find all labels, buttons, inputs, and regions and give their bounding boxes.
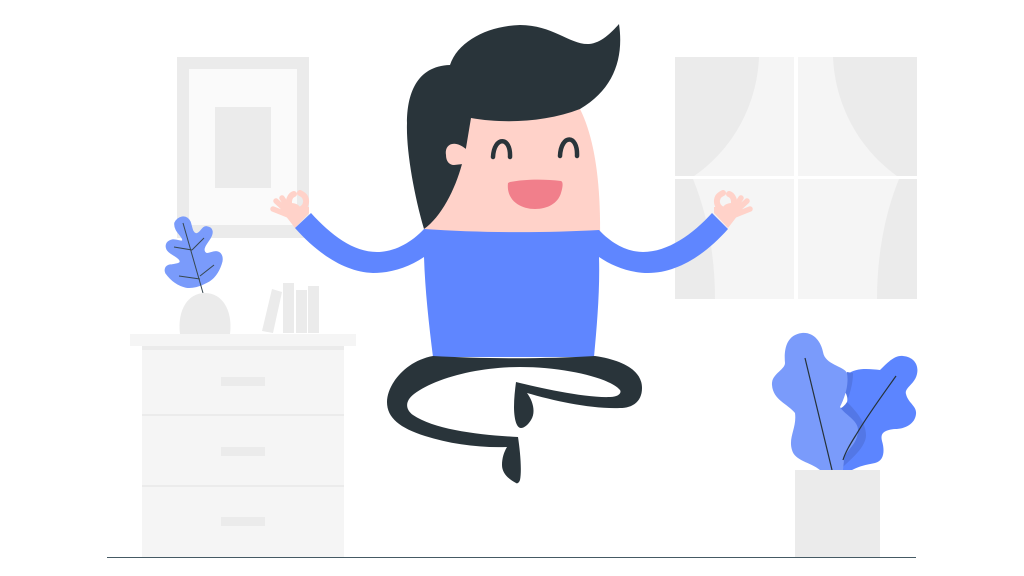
hair bbox=[407, 24, 620, 229]
picture frame bbox=[177, 57, 309, 238]
large plant bbox=[772, 333, 917, 470]
sweater and arms bbox=[295, 213, 728, 357]
dresser bbox=[130, 334, 356, 557]
right hand bbox=[714, 193, 750, 228]
face bbox=[424, 109, 600, 240]
eyes bbox=[493, 140, 577, 157]
ear bbox=[446, 144, 466, 165]
window with curtains bbox=[675, 57, 917, 299]
vase bbox=[180, 293, 230, 334]
small potted leaf bbox=[165, 217, 222, 293]
books bbox=[262, 283, 319, 333]
plant pot bbox=[795, 470, 880, 557]
crossed legs bbox=[387, 356, 642, 483]
man bbox=[273, 24, 750, 483]
left hand bbox=[273, 193, 309, 228]
mouth bbox=[508, 180, 563, 209]
ground line bbox=[107, 557, 916, 558]
